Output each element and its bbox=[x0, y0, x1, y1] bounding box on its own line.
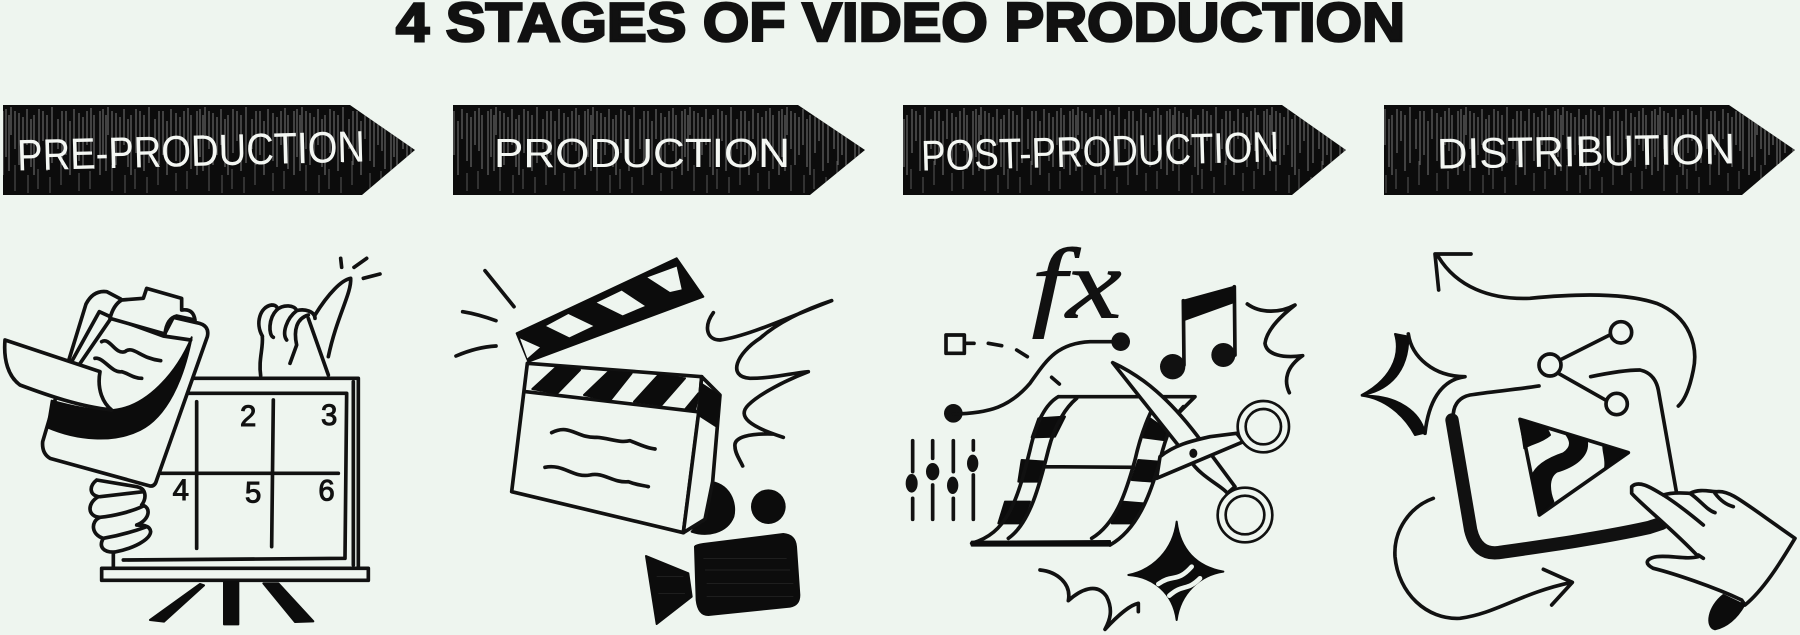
arrow: top curved bbox=[1435, 254, 1695, 406]
icon: storyboard on easel: 2 bbox=[240, 400, 256, 433]
icon: sparkle star bbox=[1128, 522, 1223, 620]
illustration: pre-production storyboard and clipboard bbox=[5, 258, 380, 624]
icon: impact lines bbox=[456, 271, 832, 466]
icon: share nodes bbox=[1539, 322, 1632, 415]
banner label: pre-production: PRE-PRODUCTION bbox=[16, 122, 366, 181]
banner: production bbox=[453, 105, 865, 195]
banner: post-production bbox=[903, 105, 1346, 195]
icon: play triangle bbox=[1520, 419, 1628, 515]
icon: scissors bbox=[1113, 363, 1285, 538]
icon: storyboard on easel: 5 bbox=[245, 477, 261, 510]
icon: bottom squiggle bbox=[1040, 570, 1138, 629]
illustration: production clapperboard and camera bbox=[456, 258, 832, 624]
icon: video camera bbox=[646, 489, 799, 624]
icon: storyboard on easel: 6 bbox=[318, 475, 335, 508]
icon: storyboard on easel: 4 bbox=[173, 474, 189, 507]
icon: fx text: fx bbox=[1032, 228, 1122, 339]
icon: music notes bbox=[1160, 287, 1235, 379]
icon: video tile bbox=[1452, 370, 1677, 553]
icon: storyboard on easel: 3 bbox=[321, 399, 337, 432]
icon: keyframe curve bbox=[944, 332, 1130, 423]
icon: pressing hand bbox=[1632, 484, 1795, 629]
banner: distribution bbox=[1384, 105, 1795, 195]
illustration: distribution video tile and hand bbox=[1362, 254, 1795, 629]
banner label: distribution: DISTRIBUTION bbox=[1437, 125, 1735, 179]
banner: pre-production bbox=[3, 105, 415, 195]
icon: film strip bbox=[972, 397, 1195, 546]
icon: storyboard on easel bbox=[102, 378, 368, 624]
icon: sparkle outline bbox=[1362, 334, 1465, 435]
arrow: bottom curved bbox=[1395, 498, 1572, 618]
icon: pointing hand bbox=[259, 258, 380, 376]
icon: sliders bbox=[906, 441, 978, 519]
icon: hand holding clipboard bbox=[5, 288, 208, 552]
banner label: production: PRODUCTION bbox=[494, 130, 790, 176]
icon: clapperboard bbox=[512, 258, 734, 534]
illustration: post-production editing tools bbox=[906, 228, 1303, 629]
icon: squiggle burst bbox=[1247, 304, 1303, 393]
banner label: post-production: POST-PRODUCTION bbox=[920, 123, 1280, 181]
